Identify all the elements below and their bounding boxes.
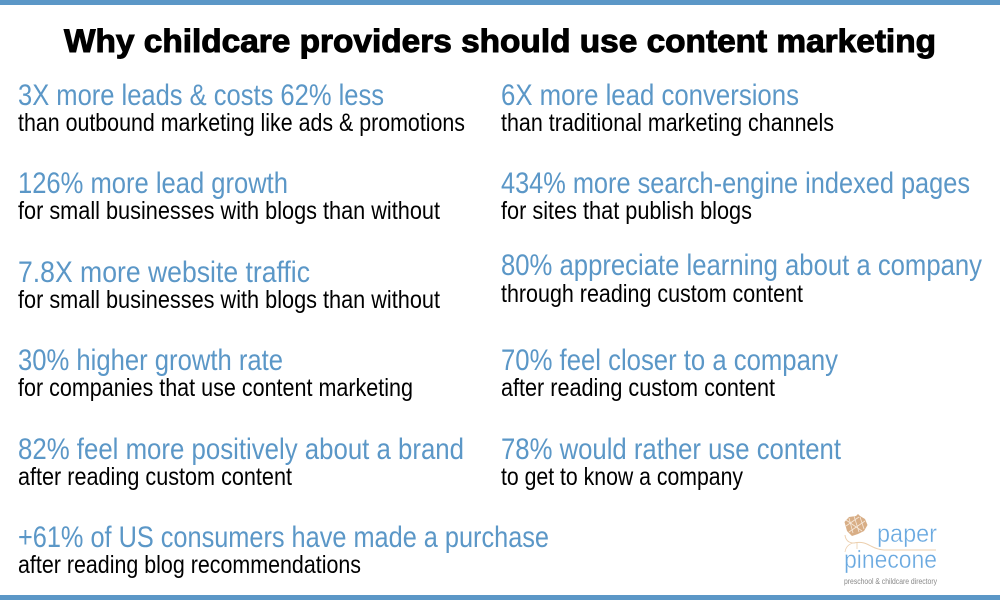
- stat: 6X conversions: [501, 79, 834, 137]
- stat: 3X more leads: [18, 79, 465, 137]
- stat: 82% feel positively: [18, 433, 464, 491]
- stat: 61% purchase: +61% of US consumers have made a purchase: [18, 521, 549, 554]
- stat: 30% growth rate: 30% higher growth rate: [18, 344, 283, 377]
- stat: 80% appreciate: [501, 249, 982, 308]
- stat: 82% feel positively: after reading custom content: [18, 463, 292, 491]
- stat: 61% purchase: [18, 521, 549, 579]
- logo: paper pinecone: pinecone: [844, 546, 937, 574]
- logo: paper pinecone: [844, 514, 937, 586]
- stat: 7.8X website traffic: [18, 256, 440, 314]
- stat: 126% lead growth: 126% more lead growth: [18, 167, 288, 200]
- stat: 80% appreciate: through reading custom content: [501, 280, 803, 308]
- stat: 3X more leads: than outbound marketing like ads & promotions: [18, 109, 465, 137]
- stat: 6X conversions: 6X more lead conversions: [501, 79, 799, 112]
- stat: 78% use content: to get to know a company: [501, 463, 743, 491]
- stat: 78% use content: [501, 433, 841, 491]
- stat: 6X conversions: than traditional marketing channels: [501, 109, 834, 137]
- stat: 434% indexed pages: for sites that publish blogs: [501, 197, 752, 225]
- stat: 61% purchase: after reading blog recommendations: [18, 551, 361, 579]
- stat: 7.8X website traffic: for small businesses with blogs than without: [18, 286, 440, 314]
- title: Why childcare providers should use content marketing: [64, 23, 936, 59]
- stat: 126% lead growth: for small businesses with blogs than without: [18, 197, 440, 225]
- stat: 7.8X website traffic: 7.8X more website traffic: [18, 256, 310, 289]
- stat: 70% feel closer: 70% feel closer to a company: [501, 344, 838, 377]
- stat: 82% feel positively: 82% feel more positively about a brand: [18, 433, 464, 466]
- stat: 126% lead growth: [18, 167, 440, 225]
- stat: 434% indexed pages: [501, 167, 970, 225]
- icon: pine cone: [844, 514, 936, 552]
- logo: paper pinecone: preschool & childcare directory: [844, 577, 937, 586]
- logo: paper pinecone: paper: [877, 520, 937, 548]
- stat: 70% feel closer: [501, 344, 838, 402]
- stat: 30% growth rate: [18, 344, 413, 402]
- stat: 3X more leads: 3X more leads & costs 62% less: [18, 79, 384, 112]
- stat: 70% feel closer: after reading custom content: [501, 374, 775, 402]
- stat: 30% growth rate: for companies that use content marketing: [18, 374, 413, 402]
- stat: 78% use content: 78% would rather use content: [501, 433, 841, 466]
